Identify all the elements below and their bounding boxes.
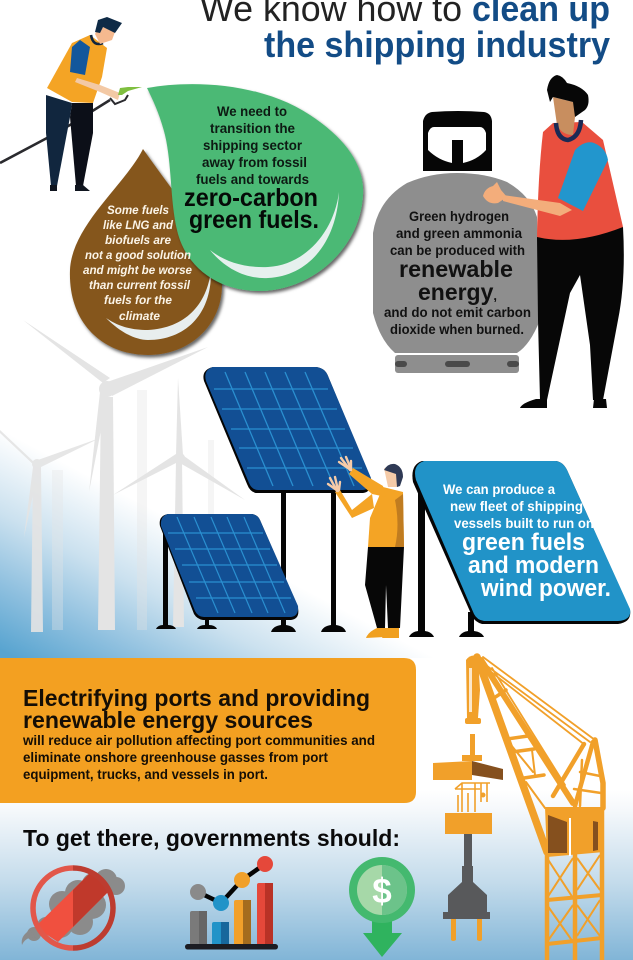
legs — [156, 528, 286, 629]
heading: governments: To get there, governments should: — [23, 825, 400, 851]
text: cylinder: and do not emit carbon — [384, 305, 531, 320]
person beside cylinder — [483, 75, 624, 408]
prohibition ring — [33, 868, 73, 948]
panel edge — [160, 514, 298, 620]
text: green droplet: zero-carbon — [184, 184, 318, 212]
panel — [205, 367, 371, 490]
plug pins — [451, 919, 482, 941]
face — [384, 468, 398, 487]
text: brown droplet — [83, 203, 192, 323]
turbine: left — [0, 430, 100, 632]
grid — [214, 372, 362, 486]
legs — [537, 227, 624, 400]
text: cylinder: renewable — [399, 256, 513, 282]
text: panel: We can produce a — [443, 482, 555, 497]
arm: upper — [349, 468, 386, 497]
panel — [415, 461, 630, 621]
text: brown droplet: not a good solution — [85, 248, 191, 262]
text: brown droplet: and might be worse — [83, 263, 192, 277]
text: cylinder: energy, — [418, 279, 497, 305]
handle — [423, 111, 492, 171]
prohibition bar — [35, 873, 110, 942]
hands — [328, 457, 351, 491]
fuel nozzle — [118, 87, 142, 95]
text: panel: new fleet of shipping — [450, 499, 583, 514]
face — [95, 27, 115, 44]
text: panel — [443, 482, 611, 602]
axis — [185, 944, 278, 950]
body text: will reduce air pollution affecting port communities and — [22, 733, 375, 748]
legs — [409, 490, 484, 637]
chart line — [198, 864, 265, 903]
title — [200, 0, 610, 65]
text: cylinder: can be produced with — [390, 243, 525, 258]
text: brown droplet: than current fossil — [89, 278, 191, 292]
text: green droplet: We need to — [217, 103, 287, 119]
highlight arc — [210, 192, 339, 278]
text: panel: vessels built to run on — [454, 516, 594, 531]
arm: lower — [335, 490, 374, 518]
shoes — [50, 185, 90, 191]
icon: money down arrow: $ — [372, 872, 392, 911]
bars — [190, 911, 207, 946]
hair — [95, 17, 122, 33]
text: cylinder: Green hydrogen — [409, 209, 509, 224]
icon: no smoke — [22, 868, 125, 948]
arm — [75, 78, 120, 100]
solar panel: large — [203, 367, 371, 632]
icon: money down arrow — [349, 857, 415, 957]
text: brown droplet: biofuels are — [105, 233, 171, 247]
base — [395, 355, 519, 373]
droplet: green fuels — [147, 84, 363, 291]
plug body — [443, 866, 490, 919]
text: green droplet: away from fossil — [202, 154, 307, 170]
legs — [365, 547, 404, 628]
solar panel: blue message board — [409, 461, 630, 637]
body text — [22, 733, 375, 782]
hose — [0, 100, 110, 163]
text: panel: wind power. — [480, 575, 611, 602]
panel: electrifying ports: renewable energy sources — [23, 707, 313, 733]
shoes — [520, 399, 607, 408]
gas cylinder — [373, 111, 540, 373]
text: green droplet: fuels and towards — [196, 171, 309, 187]
person fuelling with hose — [0, 17, 142, 191]
hair — [384, 464, 403, 487]
hoodie — [368, 487, 404, 547]
text: panel: and modern — [468, 552, 599, 579]
neck and face — [553, 97, 578, 135]
sleeve — [558, 142, 608, 211]
hoodie shade — [395, 494, 404, 547]
text: green droplet: green fuels. — [189, 206, 319, 234]
text: cylinder — [384, 209, 531, 337]
collar — [556, 120, 581, 140]
text: brown droplet: climate — [119, 309, 160, 323]
text: green droplet: shipping sector — [203, 137, 303, 153]
text: green droplet: transition the — [210, 120, 295, 136]
turbine: centre — [113, 378, 245, 627]
grid — [168, 517, 291, 613]
turbine: large — [23, 320, 208, 630]
shoes — [366, 628, 399, 638]
body — [373, 173, 540, 353]
crane boom — [477, 657, 603, 852]
highlight arc — [106, 270, 211, 340]
leg: back — [70, 103, 93, 186]
arm — [503, 195, 572, 216]
base slots — [395, 361, 519, 367]
torso — [537, 122, 623, 240]
hair — [547, 75, 589, 117]
text: panel: green fuels — [462, 529, 585, 556]
text: green droplet — [184, 103, 319, 234]
panel: electrifying ports — [0, 658, 416, 803]
sleeve — [70, 40, 90, 75]
text: brown droplet: Some fuels — [107, 203, 169, 217]
panel edge — [203, 367, 371, 493]
panel — [161, 514, 298, 617]
wind turbines — [0, 320, 245, 632]
droplet: brown fuels — [70, 149, 222, 355]
panel edge — [412, 461, 630, 624]
dots — [190, 884, 206, 900]
solar panel: small — [156, 514, 298, 629]
icon: rising chart — [185, 856, 278, 950]
text: brown droplet: fuels for the — [104, 293, 172, 307]
hook arm — [466, 656, 480, 718]
heading: Electrifying ports and providing — [23, 685, 370, 711]
text: cylinder: and green ammonia — [396, 226, 522, 241]
collar — [91, 35, 103, 44]
body text: equipment, trucks, and vessels in port. — [23, 767, 268, 782]
person at solar panels — [328, 457, 404, 638]
smoke — [22, 869, 125, 945]
text: brown droplet: like LNG and — [103, 218, 174, 232]
hook block — [433, 718, 492, 834]
plug cable — [464, 834, 472, 868]
crane with plug — [433, 656, 604, 960]
hand — [483, 182, 507, 203]
body text: eliminate onshore greenhouse gasses from port — [23, 750, 328, 765]
cabin windows — [548, 815, 598, 853]
crane tower — [547, 810, 602, 960]
leg: front — [46, 95, 72, 186]
text: cylinder: dioxide when burned. — [390, 322, 524, 337]
rigging — [455, 783, 490, 812]
title: the shipping industry — [264, 24, 610, 65]
legs — [271, 490, 346, 632]
torso — [47, 35, 107, 103]
crane cabin — [545, 807, 604, 857]
turbine: faint background — [52, 390, 214, 630]
